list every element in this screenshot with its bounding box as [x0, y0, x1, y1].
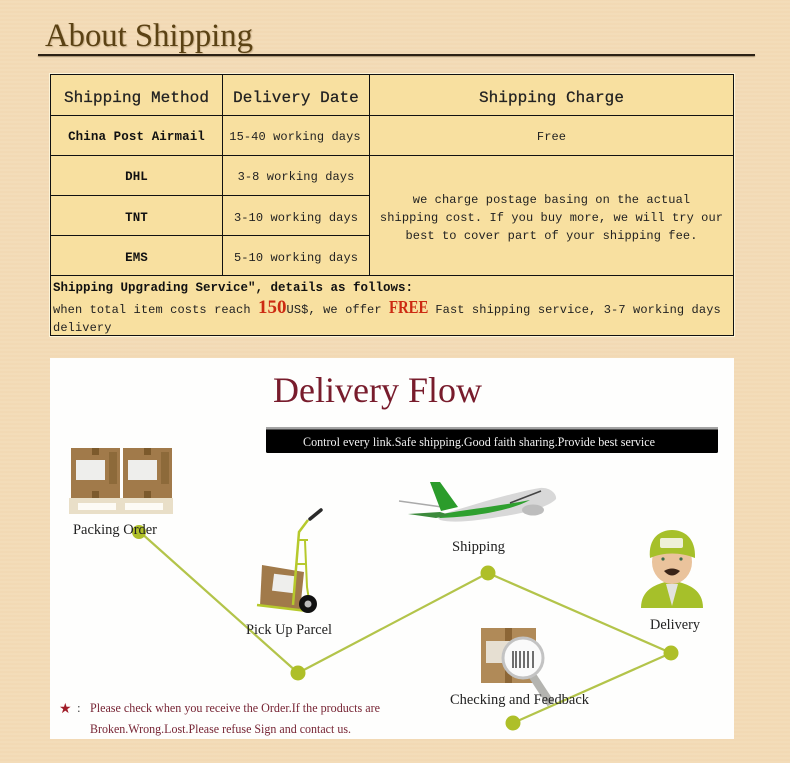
banner: service slogan: Control every link.Safe shipping.Good faith sharing.Provide best service: [303, 435, 655, 449]
row: DHL: [50, 155, 223, 196]
label: Checking and Feedback: Checking and Feedback: [450, 692, 589, 708]
icon: airplane: [399, 482, 556, 522]
icon: delivery worker: [641, 530, 703, 608]
note: check on receipt: Broken.Wrong.Lost.Please refuse Sign and contact us.: [90, 722, 351, 736]
note: check on receipt: :: [77, 700, 81, 715]
charge: free: [369, 115, 734, 156]
title: Delivery Flow: Delivery Flow: [273, 370, 482, 410]
header: delivery date: Delivery Date: [233, 89, 359, 107]
charge: free: Free: [537, 130, 566, 144]
row: EMS: EMS: [125, 250, 148, 264]
row: TNT: TNT: [125, 210, 148, 224]
date: DHL: 3-8 working days: [238, 170, 354, 184]
row: China Post Airmail: China Post Airmail: [68, 130, 205, 144]
note: check on receipt: [59, 700, 380, 736]
date: China Post: 15-40 working days: [229, 130, 361, 144]
note: check on receipt: Please check when you receive the Order.If the products are: [90, 701, 380, 715]
row: TNT: [50, 195, 223, 236]
note body: FREE: [389, 297, 428, 317]
panel: shipping table: [50, 74, 734, 336]
note heading: Shipping Upgrading Service″, details as follows:: [53, 281, 413, 295]
header: shipping charge: Shipping Charge: [479, 89, 624, 107]
date: China Post: [222, 115, 370, 156]
header: delivery date: [222, 74, 370, 116]
flow nodes: [132, 525, 678, 730]
note: shipping upgrading service: [50, 275, 734, 336]
header: shipping charge: [369, 74, 734, 116]
icon: hand trolley with parcel: [257, 510, 321, 613]
row: EMS: [50, 235, 223, 276]
date: EMS: [222, 235, 370, 276]
charge: postage note: [369, 155, 734, 276]
header: shipping method: Shipping Method: [64, 89, 209, 107]
charge: postage note: we charge postage basing on the actual shipping cost. If you buy more, we will try our best to cover part of your shipping fee.: [380, 192, 723, 242]
note: check on receipt: ★: [59, 701, 72, 717]
note body: when total item costs reach 150US$, we offer Fast shipping service, 3-7 working days: [53, 297, 721, 318]
heading: About Shipping: About Shipping: [45, 18, 253, 54]
note body: [53, 297, 721, 335]
date: TNT: [222, 195, 370, 236]
row: China Post Airmail: [50, 115, 223, 156]
flow path line: [140, 532, 671, 723]
label: Pick Up Parcel: Pick Up Parcel: [246, 622, 332, 638]
banner: service slogan: [266, 427, 718, 453]
date: DHL: [222, 155, 370, 196]
note body: delivery: [53, 321, 112, 335]
date: EMS: 5-10 working days: [234, 250, 358, 264]
label: Shipping: Shipping: [452, 539, 505, 555]
label: Delivery: Delivery: [650, 617, 700, 633]
icon: boxes on pallet: [69, 448, 173, 514]
header: shipping method: [50, 74, 223, 116]
icon: parcel under magnifier: [481, 628, 551, 704]
row: DHL: DHL: [125, 170, 148, 184]
date: TNT: 3-10 working days: [234, 210, 358, 224]
label: Packing Order: Packing Order: [73, 522, 157, 538]
panel: delivery flow: [50, 358, 734, 739]
